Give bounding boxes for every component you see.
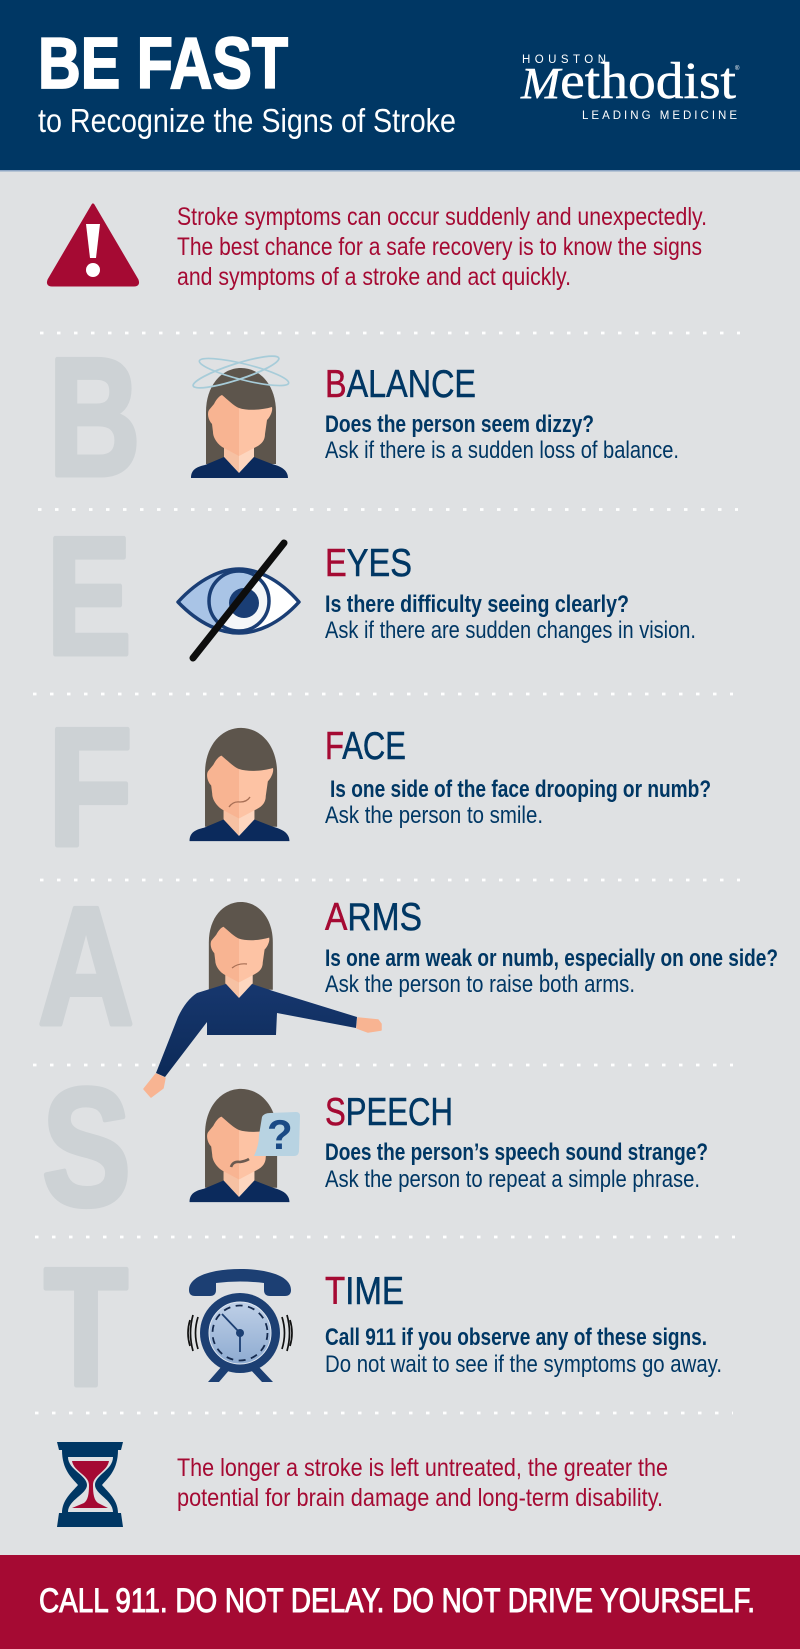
row text: eyes: Is there difficulty seeing clearly? [325, 591, 629, 618]
intro warning text [177, 203, 707, 291]
logo: Houston Methodist: Methodist [520, 53, 737, 110]
intro warning text: Stroke symptoms can occur suddenly and unexpectedly. [177, 203, 707, 231]
row text: speech: Ask the person to repeat a simple phrase. [325, 1166, 700, 1193]
row text: face: Ask the person to smile. [325, 802, 543, 829]
closing warning text: potential for brain damage and long-term disability. [177, 1484, 663, 1512]
row text: speech: SPEECH [325, 1091, 453, 1134]
row text: eyes [325, 542, 696, 644]
large letter A: A [38, 872, 134, 1060]
closing warning text: The longer a stroke is left untreated, the greater the [177, 1454, 668, 1482]
row text: arms: ARMS [325, 896, 422, 939]
footer banner [0, 1555, 800, 1649]
row text: time: Do not wait to see if the symptoms go away. [325, 1351, 722, 1378]
row text: balance: Ask if there is a sudden loss of balance. [325, 437, 679, 464]
row text: face: FACE [325, 725, 406, 768]
row text: speech [325, 1091, 708, 1193]
icon: hourglass [57, 1442, 123, 1527]
row text: time: TIME [325, 1270, 404, 1313]
row text: arms: Ask the person to raise both arms. [325, 971, 635, 998]
large letter S: S [42, 1053, 131, 1241]
icon: woman with speech bubble [190, 1089, 300, 1202]
logo: Houston Methodist: LEADING MEDICINE [582, 110, 737, 122]
icon: woman with one weak arm [144, 902, 381, 1097]
intro warning text: The best chance for a safe recovery is to know the signs [177, 233, 702, 261]
title: BE FAST [38, 24, 288, 104]
row text: balance [325, 363, 679, 464]
row text: face [325, 725, 711, 829]
large letter T: T [44, 1233, 128, 1421]
row text: eyes: Ask if there are sudden changes in vision. [325, 617, 696, 644]
subtitle: to Recognize the Signs of Stroke [38, 102, 456, 139]
logo: Houston Methodist: HOUSTON [522, 54, 606, 66]
row text: eyes: EYES [325, 542, 412, 585]
row text: time [325, 1270, 722, 1378]
icon: warning triangle [48, 205, 138, 285]
icon: crossed-out eye [178, 543, 299, 658]
large letter F: F [48, 693, 133, 881]
row text: balance: Does the person seem dizzy? [325, 411, 594, 438]
header banner [0, 0, 800, 172]
large letter B: B [48, 323, 140, 511]
closing warning text [177, 1454, 668, 1512]
row text: balance: BALANCE [325, 363, 476, 406]
icon: woman with speech bubble: ? [267, 1111, 293, 1158]
row text: arms [325, 896, 778, 998]
icon: drooping face woman [190, 728, 289, 841]
icon: ringing alarm clock with phone handset [188, 1269, 292, 1382]
intro warning text: and symptoms of a stroke and act quickly. [177, 263, 571, 291]
icon: dizzy woman [191, 350, 291, 478]
large letter E: E [46, 502, 132, 690]
logo: Houston Methodist: ® [735, 65, 740, 72]
